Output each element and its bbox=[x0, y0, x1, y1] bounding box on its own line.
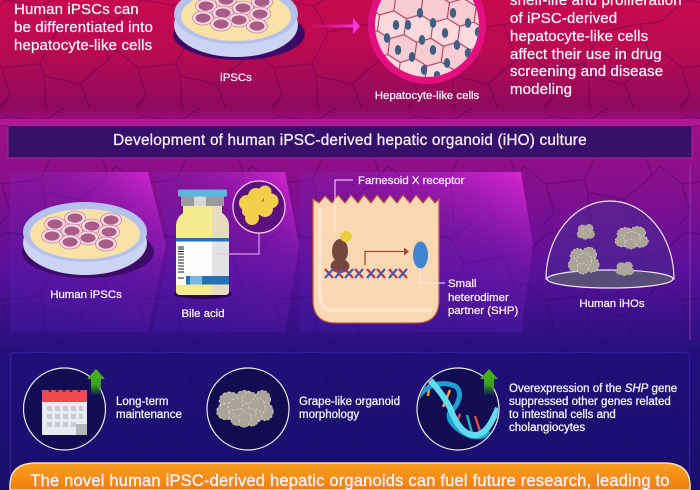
text: shelf-life and proliferation bbox=[510, 0, 682, 98]
diagram: FXR protein bbox=[330, 231, 352, 273]
text: overexpression of SHP: cholangiocytes bbox=[509, 422, 585, 434]
arrow: gene expression bbox=[365, 248, 409, 265]
label: small heterodimer partner bbox=[448, 278, 518, 317]
text: human iPSCs can be differentiated: be differentiated into bbox=[14, 19, 153, 36]
diagram: cell with FXR and SHP bbox=[313, 180, 445, 323]
text: shelf-life and proliferation: modeling bbox=[510, 81, 572, 98]
conclusion text: The novel human iPSC-derived hepatic organoids can fuel future research, leading to bbox=[30, 472, 670, 490]
label: hepatocyte-like cells: Hepatocyte-like cells bbox=[375, 90, 480, 102]
text: long-term maintenance: maintenance bbox=[116, 409, 182, 421]
icon: human iPSC dish bbox=[22, 202, 154, 278]
label: human iPSCs: Human iPSCs bbox=[50, 289, 122, 301]
diagram: SHP protein bbox=[413, 242, 428, 268]
panel: organoid culture steps bbox=[10, 165, 690, 340]
panel backgrounds bbox=[10, 172, 533, 332]
icon: calendar with up arrow bbox=[24, 368, 106, 450]
text: shelf-life and proliferation: of iPSC-derived bbox=[510, 10, 617, 27]
text: overexpression of SHP: Overexpression of the SHP gene bbox=[509, 383, 677, 395]
callout: conclusion banner bbox=[10, 463, 690, 490]
label: farnesoid X receptor: Farnesoid X receptor bbox=[358, 175, 465, 187]
icon: hepatocyte-like cells circle bbox=[368, 0, 486, 84]
text: human iPSCs can be differentiated: hepatocyte-like cells bbox=[14, 37, 152, 54]
label: small heterodimer partner: partner (SHP) bbox=[448, 305, 518, 317]
text: shelf-life and proliferation: screening and disease bbox=[510, 63, 663, 80]
text: overexpression of SHP bbox=[509, 383, 677, 434]
icon: human iHOs dome bbox=[546, 201, 674, 288]
text: human iPSCs can be differentiated: Human iPSCs can bbox=[14, 1, 139, 18]
label: iPSCs: iPSCs bbox=[220, 72, 252, 84]
icon: DNA helix with up arrow bbox=[416, 368, 499, 450]
icon: iPSC dish bbox=[173, 0, 305, 60]
label: human iHOs: Human iHOs bbox=[579, 298, 645, 310]
text: long-term maintenance: Long-term bbox=[116, 396, 168, 408]
diagram: DNA bbox=[325, 269, 407, 278]
text: overexpression of SHP: suppressed other genes related bbox=[509, 396, 671, 408]
text: grape-like organoid morphology bbox=[299, 396, 400, 421]
text: long-term maintenance bbox=[116, 396, 182, 421]
label: small heterodimer partner: heterodimer bbox=[448, 292, 509, 304]
panel: differentiation intro bbox=[14, 0, 682, 102]
text: grape-like organoid morphology: Grape-like organoid bbox=[299, 396, 400, 408]
text: overexpression of SHP: to intestinal cells and bbox=[509, 409, 616, 421]
text: shelf-life and proliferation: affect their use in drug bbox=[510, 46, 662, 63]
label: bile acid: Bile acid bbox=[181, 308, 225, 320]
icon: bile acid vial bbox=[174, 190, 232, 299]
panel: outcomes bbox=[10, 352, 690, 482]
text: human iPSCs can be differentiated bbox=[14, 1, 153, 54]
heading bar bbox=[0, 119, 700, 158]
text: grape-like organoid morphology: morphology bbox=[299, 409, 359, 421]
text: shelf-life and proliferation: hepatocyte-like cells bbox=[510, 28, 648, 45]
heading text: Development of human iPSC-derived hepatic organoid (iHO) culture bbox=[113, 132, 587, 149]
label: small heterodimer partner: Small bbox=[448, 278, 476, 290]
arrow: iPSCs to hepatocyte-like cells bbox=[312, 18, 360, 34]
icon: bile acid crystal callout bbox=[216, 181, 285, 254]
icon: grape-like organoid bbox=[207, 368, 289, 450]
